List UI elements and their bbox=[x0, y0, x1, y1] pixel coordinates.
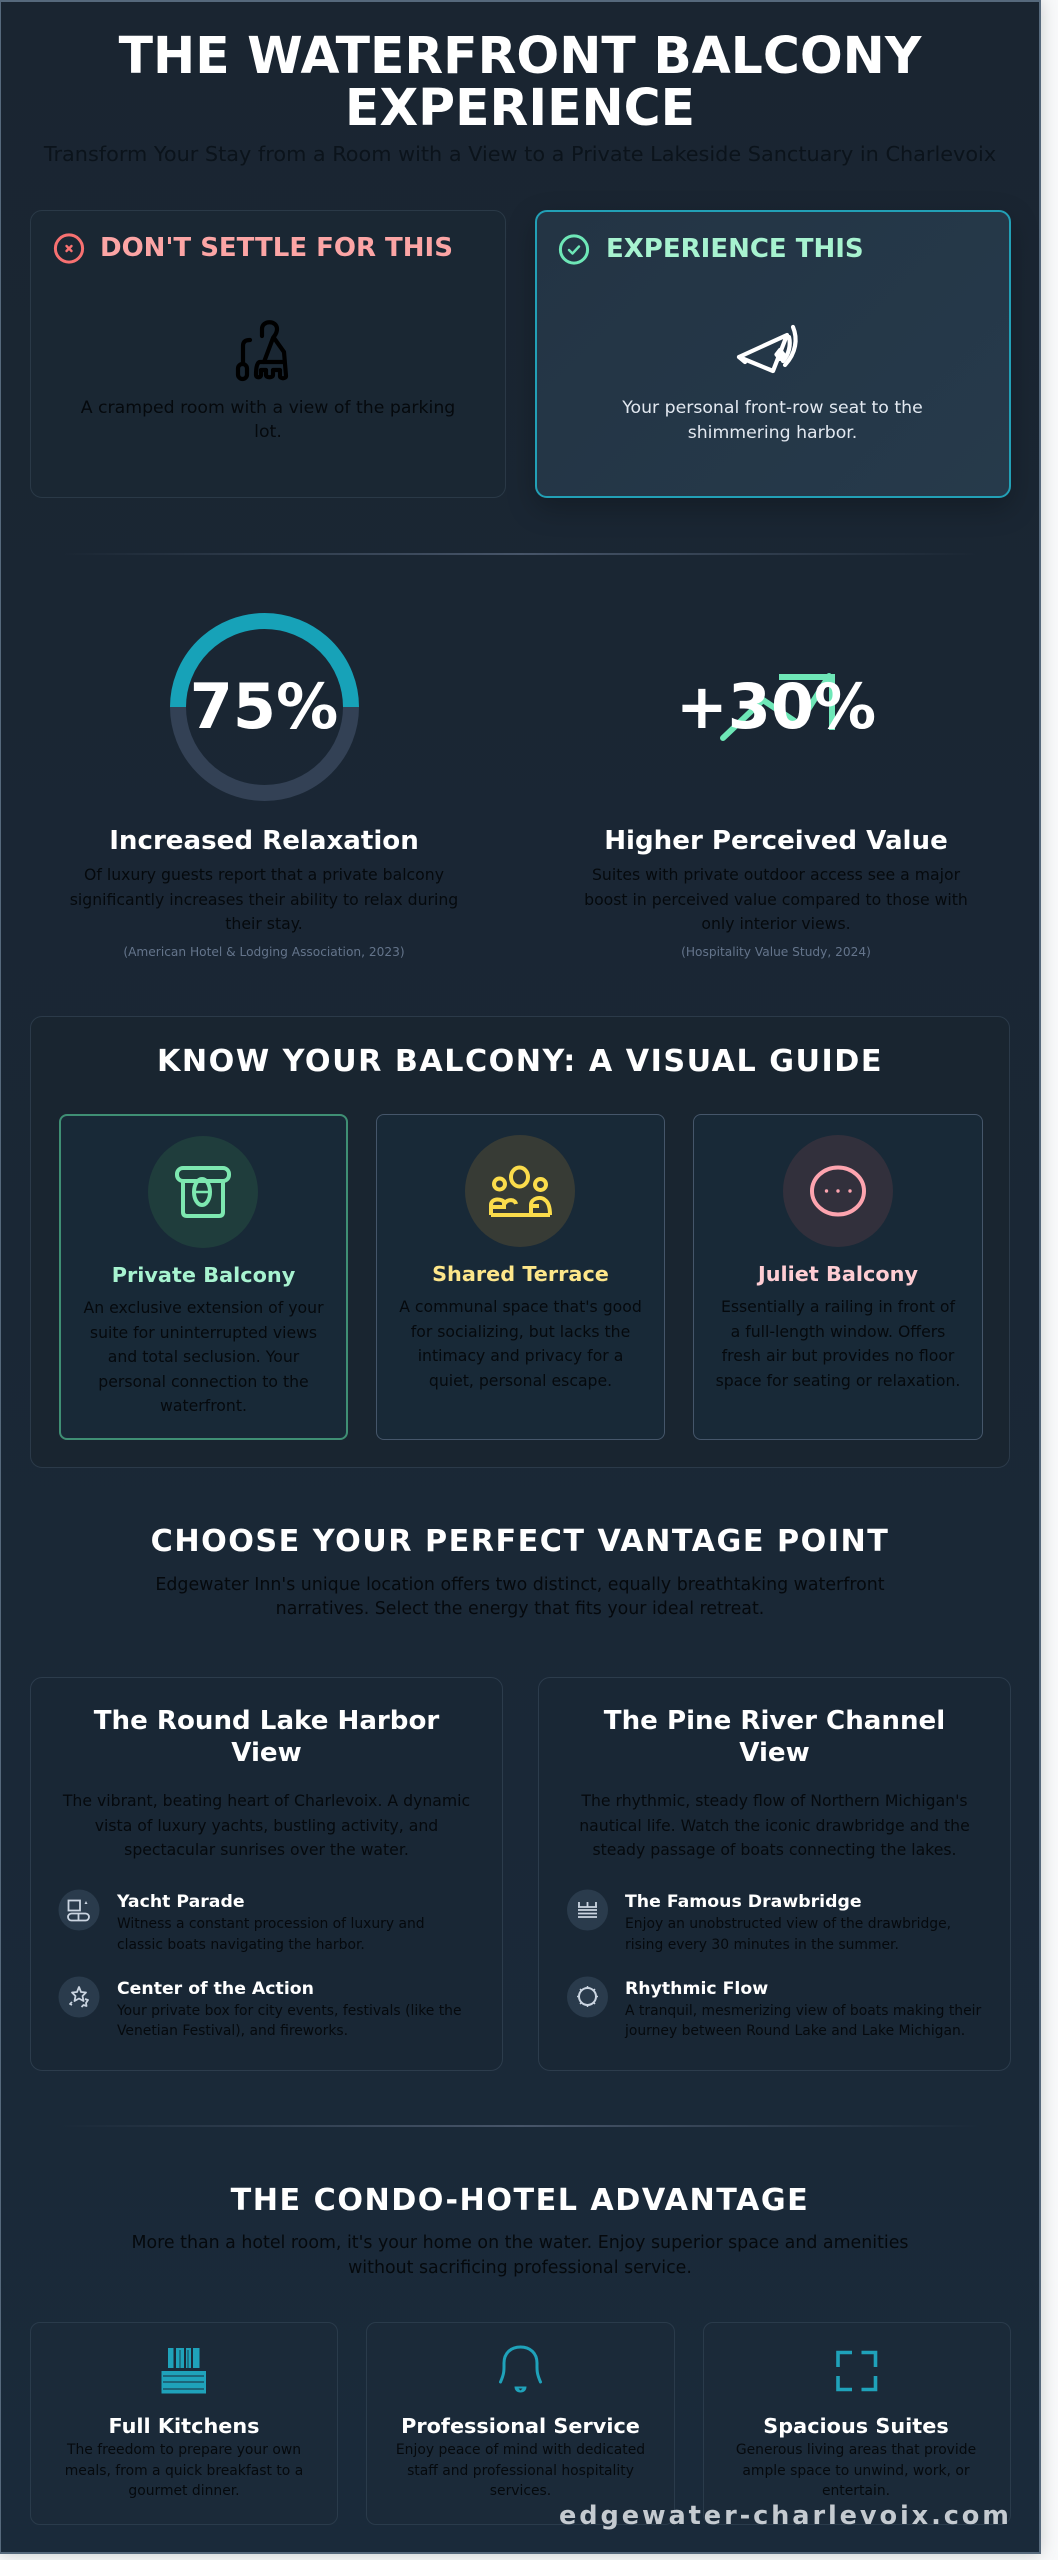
text: perceived value: Suites with private outdoor access see a major bbox=[592, 865, 960, 884]
text: pine river channel: nautical life. Watch the iconic drawbridge and the bbox=[579, 1816, 970, 1834]
text: pine river channel: The rhythmic, steady flow of Northern Michigan's bbox=[581, 1791, 968, 1810]
heading: higher perceived value: Higher Perceived Value bbox=[604, 826, 948, 856]
item title: rhythmic flow: Rhythmic Flow bbox=[625, 1979, 768, 1999]
text: private balcony: personal connection to the bbox=[98, 1372, 309, 1390]
card: spacious suites bbox=[702, 2322, 1010, 2525]
title: full kitchens: Full Kitchens bbox=[108, 2414, 260, 2438]
heading: condo-hotel advantage: THE CONDO-HOTEL ADVANTAGE bbox=[231, 2183, 809, 2218]
text: front-row seat: Your personal front-row seat to the bbox=[622, 398, 923, 418]
text: perceived value: only interior views. bbox=[701, 914, 851, 933]
text: professional service: services. bbox=[490, 2483, 551, 2499]
card: round lake harbor bbox=[30, 1677, 503, 2071]
divider bbox=[60, 553, 980, 555]
subtitle: Transform Your Stay from a Room with a View to a Private Lakeside Sanctuary in Charlevoix bbox=[44, 142, 996, 166]
text: private balcony: and total seclusion. Your bbox=[108, 1347, 299, 1366]
title: pine river channel: The Pine River Channel bbox=[604, 1706, 945, 1736]
icon: juliet balcony bbox=[783, 1135, 893, 1247]
text: round lake harbor: spectacular sunrises over the water. bbox=[124, 1840, 409, 1859]
divider bbox=[60, 2125, 980, 2127]
heading: experience this: EXPERIENCE THIS bbox=[606, 234, 864, 264]
text: juliet balcony: a full-length window. Offers bbox=[731, 1322, 945, 1340]
title: THE WATERFRONT BALCONY bbox=[119, 26, 921, 84]
card: shared terrace bbox=[376, 1114, 665, 1440]
title: EXPERIENCE bbox=[345, 78, 695, 137]
title: spacious suites: Spacious Suites bbox=[763, 2414, 949, 2438]
item text: the famous drawbridge bbox=[625, 1916, 951, 1952]
item text: yacht parade: classic boats navigating the harbor. bbox=[117, 1936, 365, 1952]
item text: the famous drawbridge: rising every 30 minutes in the summer. bbox=[625, 1936, 899, 1952]
text: private balcony: An exclusive extension of your bbox=[83, 1298, 324, 1317]
text: perceived value bbox=[584, 865, 968, 933]
text: full kitchens bbox=[65, 2442, 303, 2499]
item text: rhythmic flow bbox=[624, 2002, 982, 2039]
text: private balcony: suite for uninterrupted views bbox=[90, 1322, 317, 1342]
title: juliet balcony: Juliet Balcony bbox=[758, 1262, 918, 1286]
title bbox=[118, 26, 922, 137]
text: pine river channel bbox=[579, 1791, 970, 1859]
card: full kitchens bbox=[30, 2322, 338, 2525]
text: vantage intro bbox=[155, 1575, 885, 1619]
text: condo-hotel intro bbox=[132, 2233, 908, 2278]
item text: rhythmic flow: journey between Round Lake and Lake Michigan. bbox=[625, 2023, 965, 2039]
text: shared terrace bbox=[399, 1297, 642, 1390]
citation: (American Hotel & Lodging Association, 2023) bbox=[123, 945, 405, 959]
icon: cramped room bbox=[236, 320, 288, 382]
heading: don't settle for this: DON'T SETTLE FOR THIS bbox=[100, 233, 453, 263]
text: full kitchens: meals, from a quick breakfast to a bbox=[65, 2463, 303, 2479]
item title: center of the action: Center of the Action bbox=[117, 1979, 314, 1999]
title: round lake harbor: The Round Lake Harbor bbox=[94, 1706, 439, 1736]
text: shared terrace: intimacy and privacy for a bbox=[418, 1346, 623, 1365]
text: professional service bbox=[396, 2442, 645, 2499]
title: professional service: Professional Service bbox=[401, 2414, 640, 2438]
text: juliet balcony: Essentially a railing in front of bbox=[721, 1297, 955, 1316]
text: cramped room: A cramped room with a view of the parking bbox=[81, 398, 455, 418]
item text: center of the action: Your private box for city events, festivals (like the bbox=[117, 2002, 462, 2018]
text: cramped room: lot. bbox=[254, 422, 282, 442]
item title: the famous drawbridge: The Famous Drawbridge bbox=[625, 1892, 862, 1912]
card: private balcony bbox=[59, 1114, 348, 1440]
text: front-row seat: shimmering harbor. bbox=[688, 423, 857, 443]
text: condo-hotel intro: More than a hotel room, it's your home on the water. Enjoy superior space and amenities bbox=[132, 2233, 908, 2253]
icon: shared terrace bbox=[465, 1135, 575, 1247]
icon: x circle bbox=[54, 233, 84, 264]
stat: +30%: +30% bbox=[676, 670, 876, 743]
text: full kitchens: gourmet dinner. bbox=[128, 2483, 240, 2499]
icon: drawbridge bbox=[567, 1890, 608, 1930]
title: pine river channel bbox=[604, 1706, 945, 1768]
icon: star bbox=[58, 1976, 100, 2018]
text: vantage intro: narratives. Select the energy that fits your ideal retreat. bbox=[276, 1599, 764, 1619]
title: round lake harbor bbox=[94, 1706, 440, 1768]
text: perceived value: boost in perceived value compared to those with bbox=[584, 890, 968, 908]
item title: yacht parade: Yacht Parade bbox=[117, 1892, 245, 1912]
text: front-row seat bbox=[622, 398, 923, 443]
icon: bell bbox=[499, 2346, 542, 2392]
text: cramped room bbox=[81, 398, 455, 442]
title: pine river channel: View bbox=[739, 1738, 810, 1768]
text: relaxation: significantly increases their ability to relax during bbox=[70, 890, 458, 908]
panel: don't settle bbox=[30, 210, 506, 498]
text: shared terrace: A communal space that's good bbox=[399, 1297, 642, 1316]
text: private balcony bbox=[83, 1298, 324, 1415]
text: round lake harbor bbox=[62, 1791, 470, 1859]
text: condo-hotel intro: without sacrificing professional service. bbox=[348, 2258, 692, 2278]
text: spacious suites: ample space to unwind, work, or bbox=[742, 2463, 970, 2479]
card: juliet balcony bbox=[693, 1114, 983, 1440]
heading: vantage point: CHOOSE YOUR PERFECT VANTAGE POINT bbox=[151, 1524, 889, 1559]
text: full kitchens: The freedom to prepare your own bbox=[67, 2442, 301, 2458]
text: shared terrace: for socializing, but lacks the bbox=[411, 1322, 630, 1340]
text: vantage intro: Edgewater Inn's unique location offers two distinct, equally breathtaking waterfront bbox=[155, 1575, 885, 1595]
item text: center of the action bbox=[117, 2002, 462, 2039]
heading: increased relaxation: Increased Relaxation bbox=[109, 826, 419, 856]
text: relaxation bbox=[70, 865, 458, 933]
icon: check circle bbox=[558, 234, 590, 265]
text: relaxation: Of luxury guests report that a private balcony bbox=[84, 865, 444, 884]
icon: private balcony bbox=[148, 1136, 258, 1248]
panel: experience this bbox=[534, 210, 1010, 498]
card: pine river channel bbox=[538, 1677, 1011, 2071]
heading: visual guide: KNOW YOUR BALCONY: A VISUAL GUIDE bbox=[157, 1044, 883, 1079]
icon: trend arrow bbox=[720, 673, 835, 741]
text: spacious suites: entertain. bbox=[822, 2483, 890, 2499]
text: round lake harbor: vista of luxury yachts, bustling activity, and bbox=[95, 1816, 438, 1834]
text: juliet balcony: space for seating or relaxation. bbox=[716, 1370, 960, 1390]
stat: 75%: 75% bbox=[190, 670, 338, 743]
text: relaxation: their stay. bbox=[225, 914, 303, 933]
panel: visual guide bbox=[30, 1016, 1010, 1468]
icon: eye bbox=[736, 324, 798, 374]
text: juliet balcony bbox=[716, 1297, 960, 1390]
item text: yacht parade: Witness a constant procession of luxury and bbox=[117, 1916, 425, 1932]
text: professional service: Enjoy peace of mind with dedicated bbox=[396, 2442, 645, 2458]
text: pine river channel: steady passage of boats connecting the lakes. bbox=[592, 1840, 956, 1859]
chart: 75% ring bbox=[170, 613, 359, 801]
text: juliet balcony: fresh air but provides no floor bbox=[722, 1346, 954, 1365]
title: private balcony: Private Balcony bbox=[112, 1263, 295, 1287]
item text: center of the action: Venetian Festival), and fireworks. bbox=[117, 2023, 348, 2039]
icon: yacht bbox=[58, 1890, 100, 1930]
item text: rhythmic flow: A tranquil, mesmerizing view of boats making their bbox=[625, 2002, 981, 2018]
icon: kitchen bbox=[162, 2348, 206, 2394]
title: shared terrace: Shared Terrace bbox=[432, 1262, 609, 1286]
text: spacious suites: Generous living areas that provide bbox=[736, 2442, 976, 2458]
text: spacious suites bbox=[736, 2442, 976, 2499]
text: shared terrace: quiet, personal escape. bbox=[429, 1370, 612, 1390]
citation: (Hospitality Value Study, 2024) bbox=[681, 945, 871, 959]
item text: the famous drawbridge: Enjoy an unobstructed view of the drawbridge, bbox=[625, 1916, 951, 1932]
icon: flow bbox=[567, 1976, 608, 2018]
text: private balcony: waterfront. bbox=[160, 1396, 247, 1415]
title: round lake harbor: View bbox=[231, 1738, 302, 1768]
item text: yacht parade bbox=[117, 1916, 425, 1952]
card: professional service bbox=[366, 2322, 675, 2525]
icon: expand bbox=[836, 2350, 878, 2392]
watermark: edgewater-charlevoix.com bbox=[559, 2501, 1012, 2531]
text: professional service: staff and professional hospitality bbox=[407, 2463, 634, 2479]
text: round lake harbor: The vibrant, beating heart of Charlevoix. A dynamic bbox=[63, 1791, 470, 1810]
